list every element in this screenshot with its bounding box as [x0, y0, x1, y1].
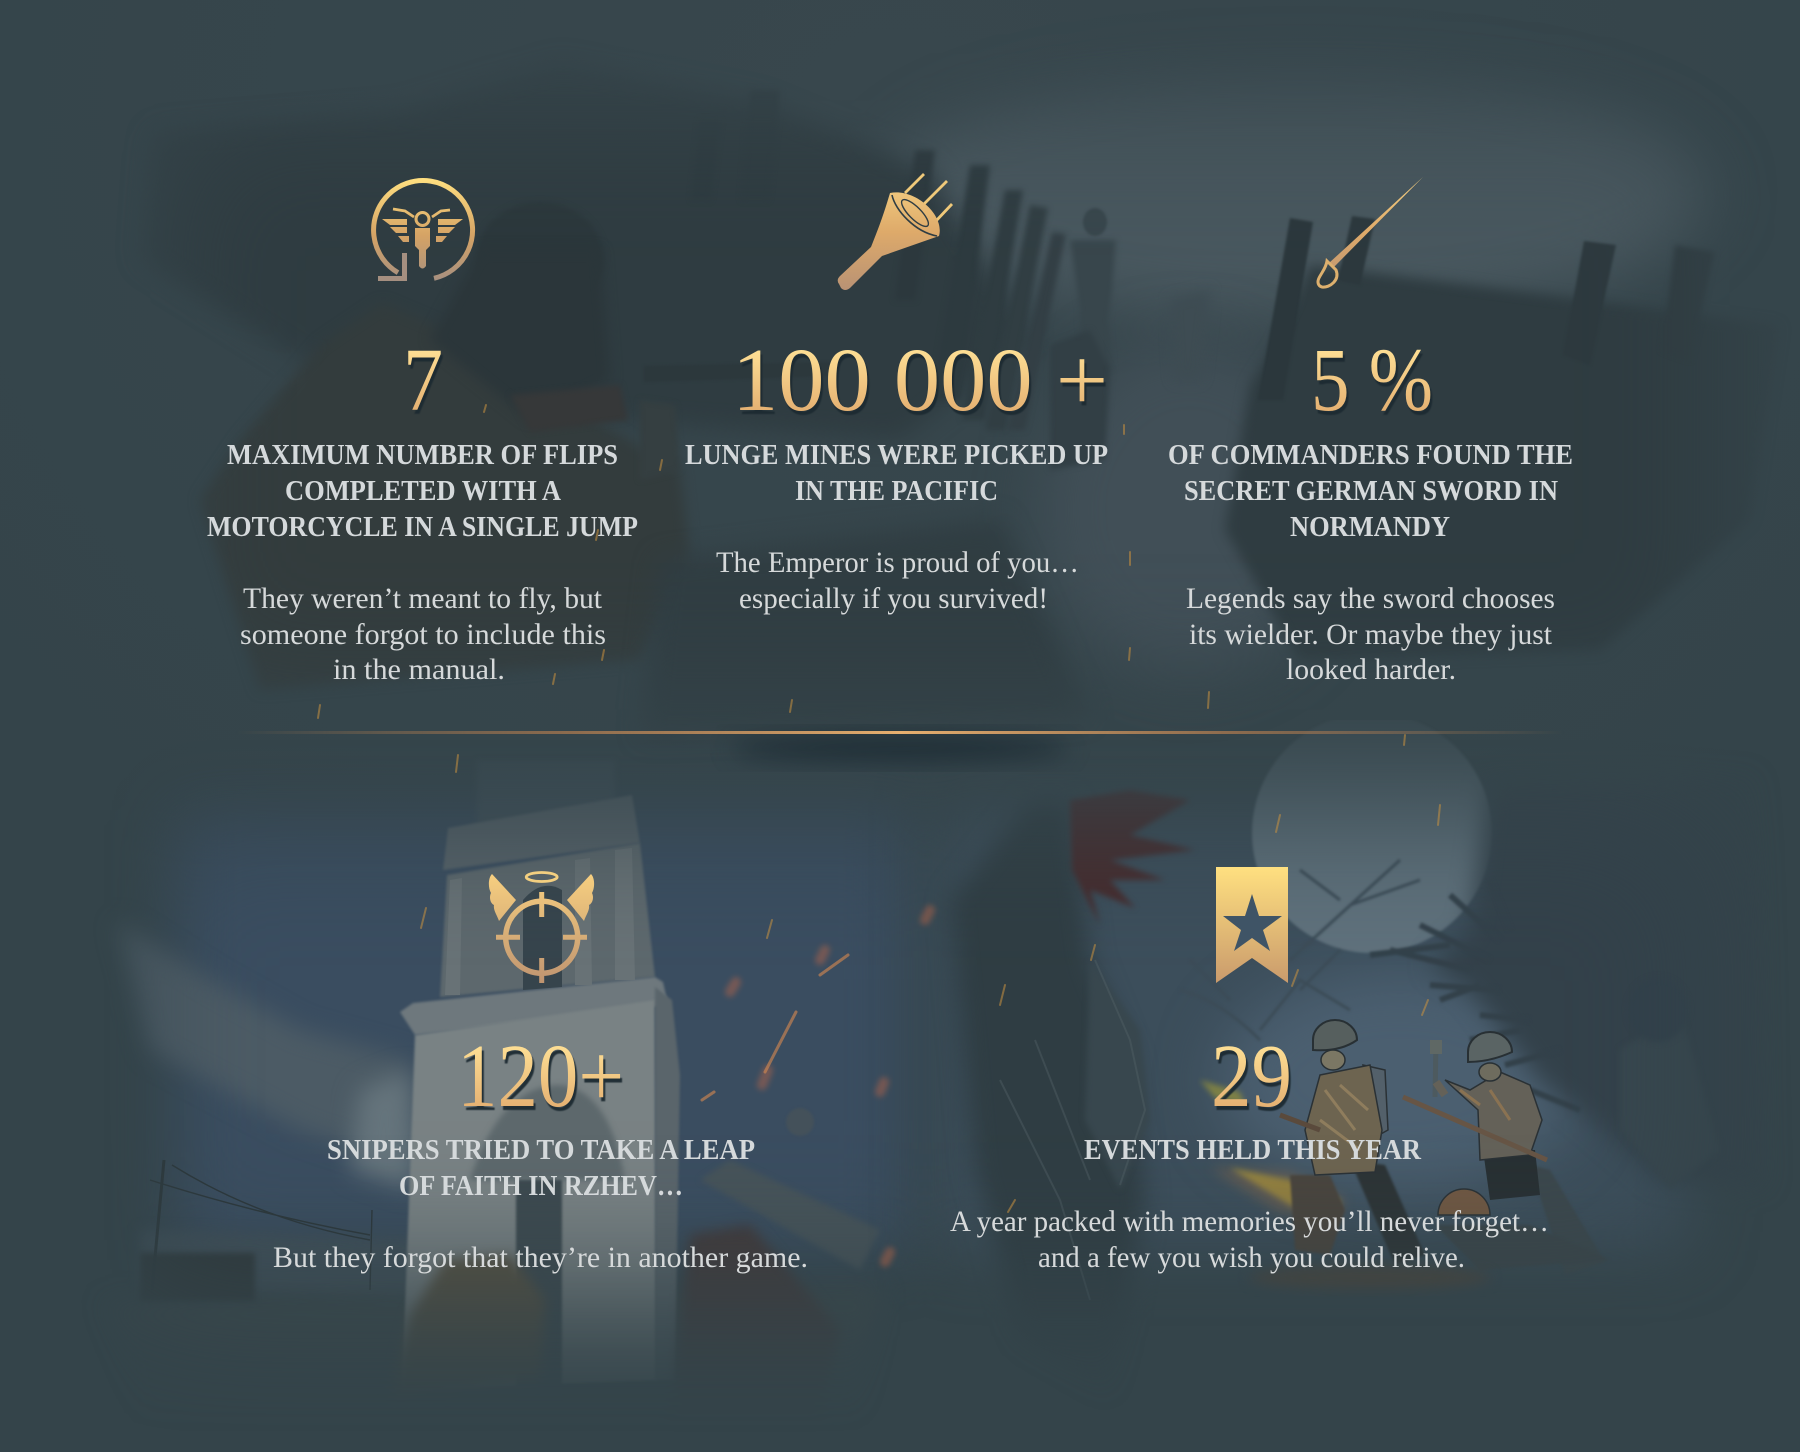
panel: events: [950, 867, 1549, 1274]
heading: sword: SECRET GERMAN SWORD IN: [1184, 476, 1558, 507]
body: lunge mines: The Emperor is proud of you…: [716, 546, 1079, 579]
body: sword: its wielder. Or maybe they just: [1189, 618, 1553, 651]
panel: motorcycle flips: [207, 181, 638, 686]
body: sword: looked harder.: [1286, 653, 1456, 686]
panel: lunge mines: [685, 174, 1108, 615]
body: flips: in the manual.: [333, 653, 505, 686]
heading: flips: MAXIMUM NUMBER OF FLIPS: [227, 440, 618, 471]
icon: ribbon with star: [1216, 867, 1288, 983]
heading: flips: COMPLETED WITH A: [285, 476, 562, 507]
body: events: and a few you wish you could relive.: [1038, 1241, 1465, 1274]
icon: winged crosshair with halo: [489, 872, 594, 983]
panel: snipers: [273, 872, 808, 1274]
body: flips: someone forgot to include this: [240, 618, 606, 651]
icon: sword: [1318, 177, 1423, 287]
heading: flips: MOTORCYCLE IN A SINGLE JUMP: [207, 512, 638, 543]
icon: motorcycle ring: [374, 181, 473, 281]
heading: lunge mines: [685, 440, 1108, 507]
number: 100 000 +: 100 000 +: [732, 331, 1108, 430]
heading: lunge mines: LUNGE MINES WERE PICKED UP: [685, 440, 1108, 471]
background scene: bell tower and sky: [125, 746, 1678, 1367]
heading: sword: OF COMMANDERS FOUND THE: [1168, 440, 1573, 471]
heading: snipers: OF FAITH IN RZHEV…: [399, 1171, 683, 1202]
soldiers: [1200, 1020, 1610, 1275]
heading: events: EVENTS HELD THIS YEAR: [1084, 1135, 1422, 1166]
body: flips: They weren’t meant to fly, but: [243, 582, 603, 615]
number: 29: 29: [1211, 1027, 1292, 1126]
body: sword: Legends say the sword chooses: [1186, 582, 1555, 615]
embers: [318, 405, 1440, 1262]
number: 7: 7: [403, 331, 443, 430]
dark glow under divider: [730, 733, 1070, 763]
heading: lunge mines: IN THE PACIFIC: [795, 476, 998, 507]
heading: snipers: [327, 1135, 755, 1202]
body: lunge mines: [716, 546, 1079, 615]
icon: lunge mine: [838, 174, 952, 290]
body: lunge mines: especially if you survived!: [739, 582, 1048, 615]
divider line: [235, 731, 1565, 734]
number: 120+: 120+: [457, 1027, 624, 1126]
heading: snipers: SNIPERS TRIED TO TAKE A LEAP: [327, 1135, 755, 1166]
heading: sword: [1168, 440, 1573, 543]
body: events: [950, 1205, 1549, 1274]
heading: flips: [207, 440, 638, 543]
heading: sword: NORMANDY: [1290, 512, 1450, 543]
body: snipers: But they forgot that they’re in another game.: [273, 1241, 808, 1274]
number: 5 %: 5 %: [1311, 331, 1433, 430]
body: events: A year packed with memories you’ll never forget…: [950, 1205, 1549, 1238]
body: sword: [1186, 582, 1555, 686]
background scene: trench and soldier: [186, 97, 1699, 682]
body: flips: [240, 582, 606, 686]
panel: secret sword: [1168, 177, 1573, 686]
